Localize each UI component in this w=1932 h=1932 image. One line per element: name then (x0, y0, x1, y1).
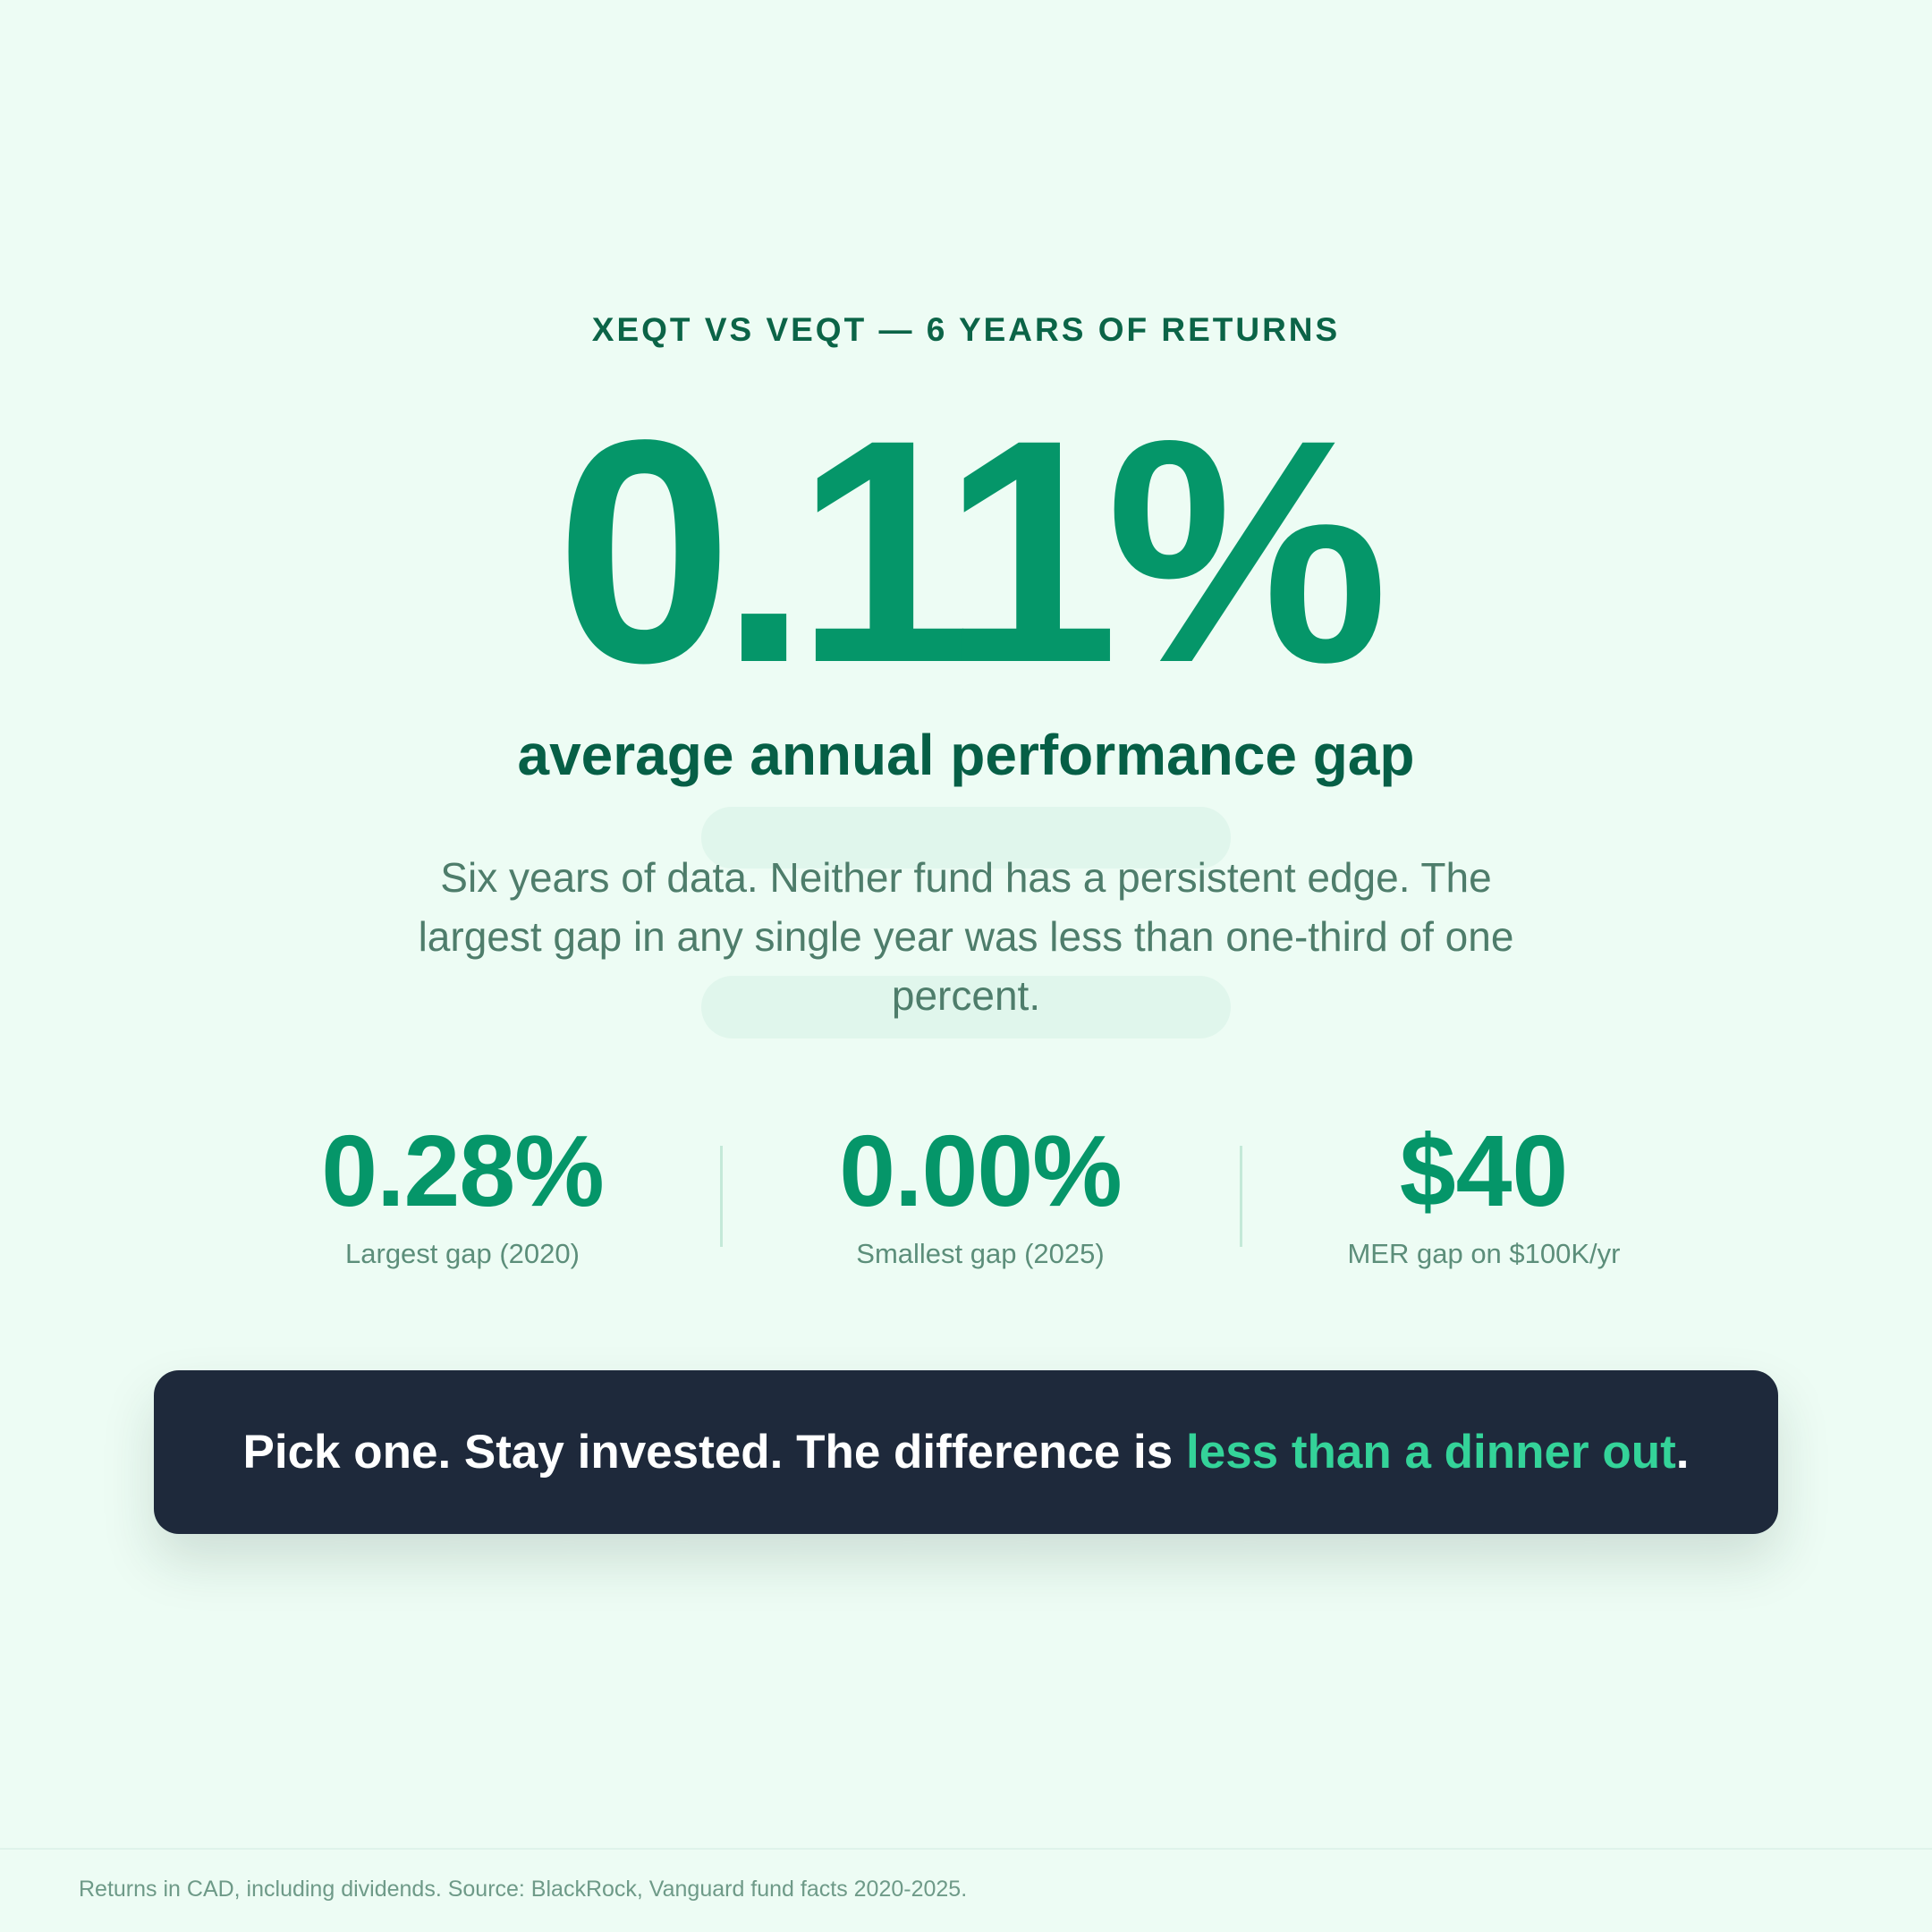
callout banner: less than a dinner out (1186, 1426, 1676, 1479)
divider 1 (720, 1146, 723, 1247)
title: XEQT VS VEQT — 6 YEARS OF RETURNS (592, 311, 1340, 348)
subtitle: average annual performance gap (517, 723, 1415, 787)
stat: smallest gap: 0.00% (839, 1114, 1122, 1227)
footer source: Returns in CAD, including dividends. Source: BlackRock, Vanguard fund facts 2020-2025. (79, 1877, 967, 1902)
stat: largest gap: Largest gap (2020) (345, 1238, 580, 1269)
stat: MER gap: MER gap on $100K/yr (1347, 1238, 1621, 1269)
stat: MER gap (1347, 1114, 1621, 1269)
footer divider (0, 1848, 1932, 1850)
decorative pill bottom (701, 976, 1231, 1038)
callout banner (154, 1370, 1778, 1534)
stat: largest gap: 0.28% (321, 1114, 604, 1227)
divider 2 (1240, 1146, 1242, 1247)
decorative pill top (701, 807, 1231, 869)
stat: MER gap: $40 (1400, 1114, 1568, 1227)
stat: smallest gap: Smallest gap (2025) (856, 1238, 1105, 1269)
callout banner: Pick one. Stay invested. The difference is . (243, 1426, 1689, 1479)
description text: Six years of data. Neither fund has a persistent edge. The largest gap in any single year was less than one-third of one percent. (419, 854, 1513, 1019)
hero number: 0.11% (556, 375, 1376, 729)
